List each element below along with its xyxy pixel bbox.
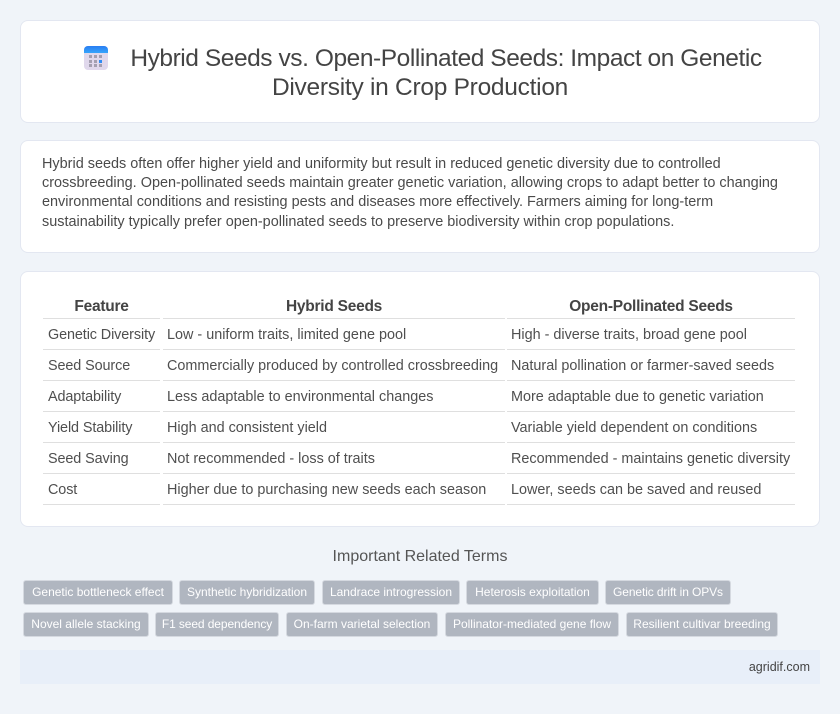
panel: header xyxy=(20,20,820,123)
footer credit: agridif.com xyxy=(749,660,810,674)
row: Cost xyxy=(48,482,761,498)
row: Adaptability xyxy=(48,389,764,405)
text block: summary: sustainability typically prefer open-pollinated seeds to preserve biodiversity within crop populations. xyxy=(42,214,674,230)
tags: related terms: Landrace introgression xyxy=(330,585,452,599)
row: Seed Source: Natural pollination or farmer-saved seeds xyxy=(511,358,774,374)
heading: related terms: Important Related Terms xyxy=(333,548,507,565)
table header: Open-Pollinated Seeds: Open-Pollinated Seeds xyxy=(569,298,733,315)
tags: related terms: Genetic bottleneck effect xyxy=(32,585,164,599)
row: Seed Source: Commercially produced by controlled crossbreeding xyxy=(167,358,498,374)
panel: comparison table xyxy=(20,271,820,527)
row: Genetic Diversity xyxy=(48,327,747,343)
row: Seed Saving xyxy=(48,451,790,467)
text block: summary: crossbreeding. Open-pollinated seeds maintain greater genetic variation, allowing crops to adapt better to changing xyxy=(42,175,778,191)
row: Yield Stability: Yield Stability xyxy=(48,420,132,436)
text block: summary: Hybrid seeds often offer higher yield and uniformity but result in reduced genetic diversity due to controlled xyxy=(42,156,721,172)
tags: related terms: Synthetic hybridization xyxy=(187,585,307,599)
row: Genetic Diversity: High - diverse traits, broad gene pool xyxy=(511,327,747,343)
tags: related terms: F1 seed dependency xyxy=(162,617,272,631)
tags: related terms: Heterosis exploitation xyxy=(475,585,590,599)
row: Seed Saving: Not recommended - loss of traits xyxy=(167,451,375,467)
row: Yield Stability: High and consistent yield xyxy=(167,420,327,436)
row: Genetic Diversity: Genetic Diversity xyxy=(48,327,155,343)
row: Cost: Lower, seeds can be saved and reused xyxy=(511,482,761,498)
row: Seed Source: Seed Source xyxy=(48,358,130,374)
title: Diversity in Crop Production xyxy=(272,74,568,101)
text block: summary: environmental conditions and resisting pests and diseases more effectively. Farmers aiming for long-term xyxy=(42,194,713,210)
row: Adaptability: More adaptable due to genetic variation xyxy=(511,389,764,405)
table header: Feature: Feature xyxy=(74,298,129,315)
row: Seed Source xyxy=(48,358,774,374)
row: Genetic Diversity: Low - uniform traits, limited gene pool xyxy=(167,327,406,343)
tags: related terms: On-farm varietal selection xyxy=(294,617,430,631)
text block: summary xyxy=(42,156,778,230)
tags: related terms: Genetic drift in OPVs xyxy=(613,585,723,599)
row: Cost: Cost xyxy=(48,482,77,498)
tags: related terms: Novel allele stacking xyxy=(31,617,141,631)
tags: related terms: Pollinator-mediated gene flow xyxy=(453,617,611,631)
row: Adaptability: Less adaptable to environmental changes xyxy=(167,389,433,405)
tags: related terms xyxy=(23,580,778,637)
footer xyxy=(20,650,820,684)
row: Seed Saving: Recommended - maintains genetic diversity xyxy=(511,451,790,467)
table header: Hybrid Seeds: Hybrid Seeds xyxy=(286,298,382,315)
panel: summary xyxy=(20,140,820,253)
row: Yield Stability xyxy=(48,420,757,436)
title xyxy=(130,45,762,101)
row: Yield Stability: Variable yield dependent on conditions xyxy=(511,420,757,436)
icon: calendar xyxy=(84,46,108,70)
tags: related terms: Resilient cultivar breeding xyxy=(633,617,771,631)
row: Cost: Higher due to purchasing new seeds each season xyxy=(167,482,486,498)
title: Hybrid Seeds vs. Open-Pollinated Seeds: Impact on Genetic xyxy=(130,45,762,72)
row: Adaptability: Adaptability xyxy=(48,389,121,405)
row: Seed Saving: Seed Saving xyxy=(48,451,129,467)
